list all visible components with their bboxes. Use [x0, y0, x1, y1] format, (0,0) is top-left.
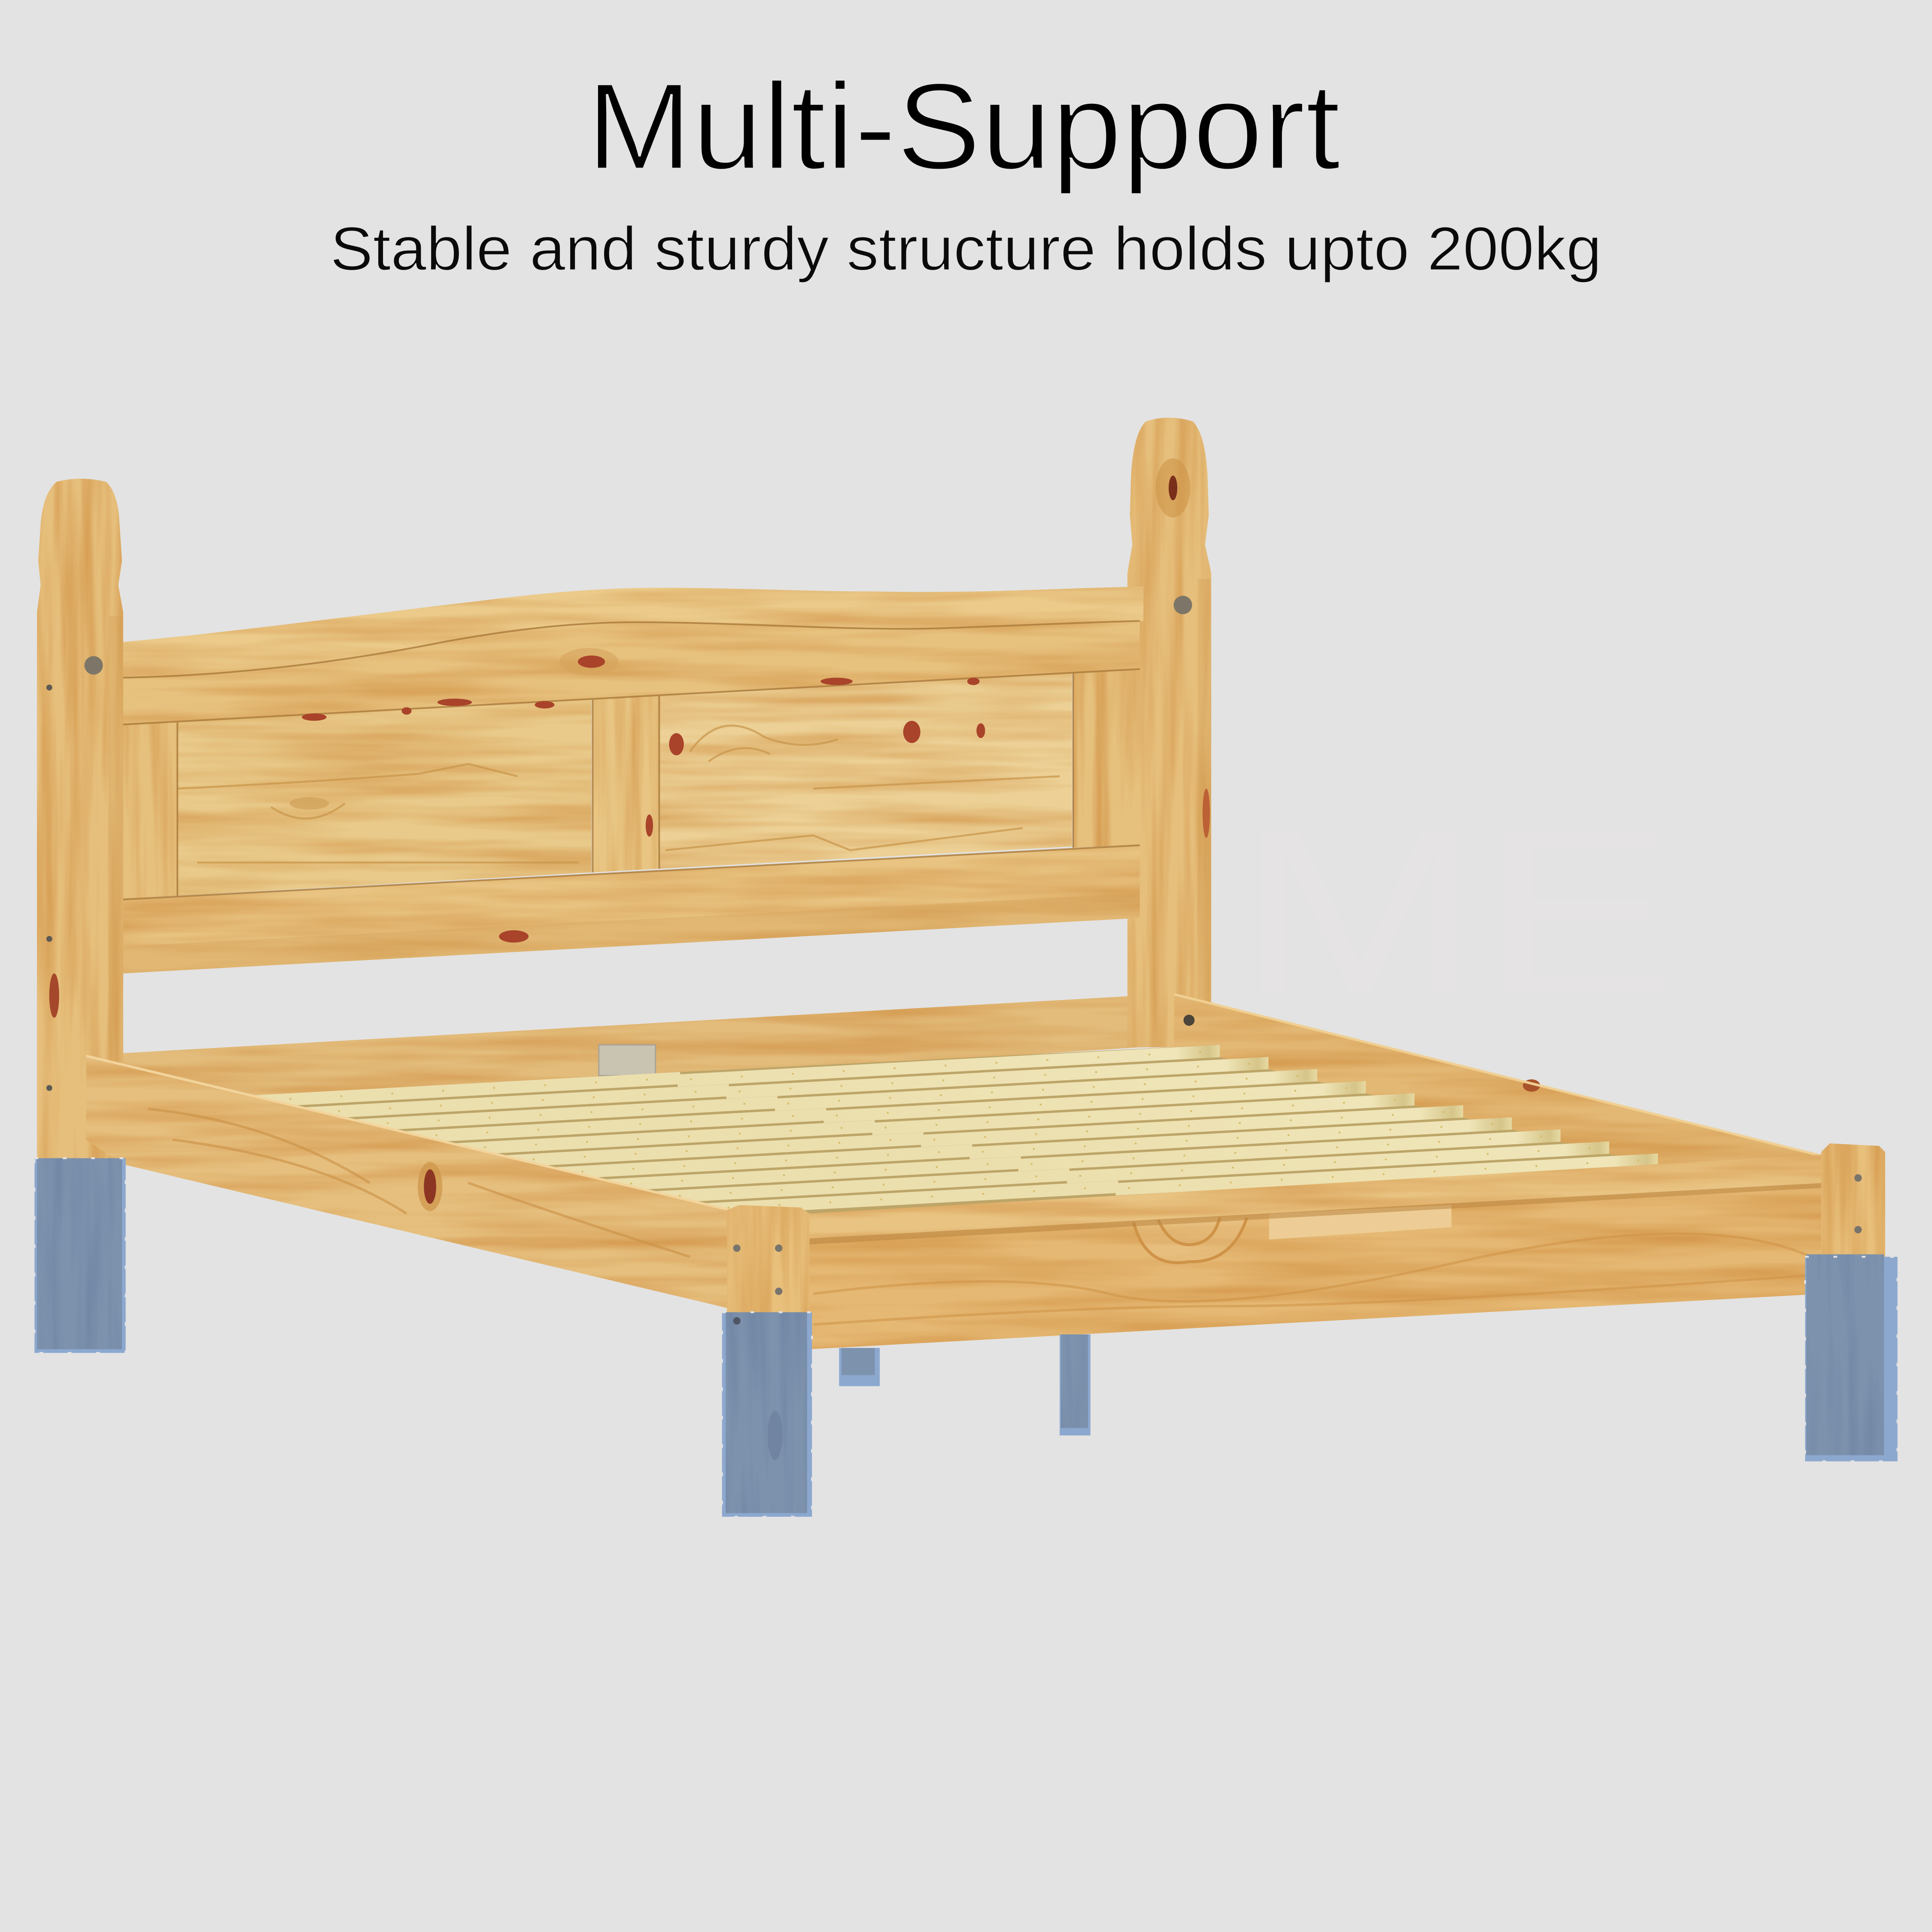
left panel [177, 699, 592, 896]
left stile [123, 721, 177, 899]
post side screws [46, 685, 52, 1091]
metal centre bracket [599, 1045, 656, 1075]
right panel [659, 673, 1072, 869]
title: Multi-Support [586, 57, 1341, 196]
front left post screws [733, 1245, 782, 1295]
crown rail [123, 586, 1143, 677]
knot on right post [1156, 459, 1190, 517]
front left post [727, 1205, 810, 1316]
post bolt cap [1174, 596, 1192, 614]
screw on blue front left leg [733, 1317, 741, 1324]
slat base [252, 1045, 1657, 1226]
front rail top strip [807, 1154, 1823, 1238]
leg: hidden centre back [839, 1348, 880, 1386]
left side rail [86, 1056, 729, 1309]
panel joint lines [123, 621, 1140, 899]
leg: front right [1805, 1255, 1898, 1461]
board knot rings [1133, 1217, 1247, 1263]
right side rail inner face [1174, 993, 1821, 1166]
bed illustration [34, 418, 1898, 1517]
left post [37, 479, 123, 1164]
slats right half [677, 1045, 1658, 1195]
subtitle: Stable and sturdy structure holds upto 200kg [330, 215, 1602, 283]
upper panel rail [123, 621, 1140, 725]
middle stile [592, 695, 659, 872]
bottom rail [123, 845, 1140, 973]
leg: back left [34, 1158, 126, 1353]
post bolt cap [85, 656, 103, 674]
side rail bolt [1184, 1015, 1194, 1026]
leg: front left [722, 1312, 812, 1517]
slats left half [252, 1072, 1118, 1216]
board shadow under strip [810, 1183, 1823, 1245]
highlighted blue support legs [34, 1158, 1898, 1517]
panel grain figure [177, 726, 1060, 863]
right stile [1073, 669, 1140, 848]
headboard [123, 586, 1143, 973]
leg: hidden centre front [1060, 1334, 1091, 1435]
front right post [1821, 1143, 1885, 1259]
headboard knots [289, 648, 985, 942]
rail grain swirls [148, 1109, 690, 1257]
back rail of bed frame [117, 996, 1140, 1103]
watermark: ME [1238, 780, 1676, 1042]
front rail lower board [810, 1183, 1823, 1349]
board grain lines [813, 1233, 1811, 1324]
front right post screws [1854, 1174, 1862, 1233]
right post [1127, 418, 1211, 1047]
